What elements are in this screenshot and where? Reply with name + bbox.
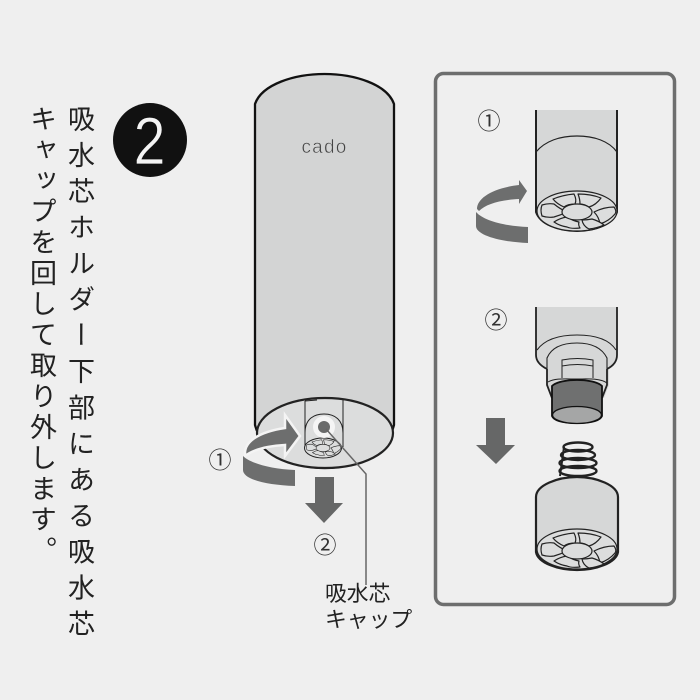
step number badge — [113, 103, 187, 179]
detail step 1 label: ① — [478, 102, 500, 136]
detail down arrow — [476, 418, 515, 464]
bottom opening disc — [257, 398, 393, 468]
down arrow (main) — [305, 477, 343, 523]
instruction text: first column: 吸水芯ホルダー下部にある吸水芯 — [64, 105, 94, 646]
detail step 2 label: ② — [484, 301, 508, 335]
absorbent wick cap — [313, 416, 335, 438]
panel: detail frame — [436, 74, 674, 604]
rotation arrow 1 (main) — [243, 415, 300, 486]
wick cap cylinder — [552, 380, 602, 423]
label: circled 2 (main): ② — [314, 526, 336, 560]
main illustration: cylinder product — [255, 74, 394, 468]
detail step 1 illustration — [536, 110, 617, 231]
label: circled 1 (main): ① — [208, 441, 232, 475]
instruction text: second column: キャップを回して取り外します。 — [26, 105, 56, 567]
step number badge: 2 — [133, 104, 166, 179]
wick holder — [304, 399, 343, 458]
detail step 2: holder with cap removed — [536, 307, 617, 424]
detail rotation arrow — [476, 180, 528, 243]
leader line — [326, 429, 366, 585]
cado logo: cado — [301, 137, 348, 158]
label: wick cap: 吸水芯 — [325, 581, 391, 606]
detail step 2: detached wick holder — [536, 477, 618, 570]
label: wick cap: キャップ — [325, 607, 412, 632]
spring — [560, 442, 596, 476]
